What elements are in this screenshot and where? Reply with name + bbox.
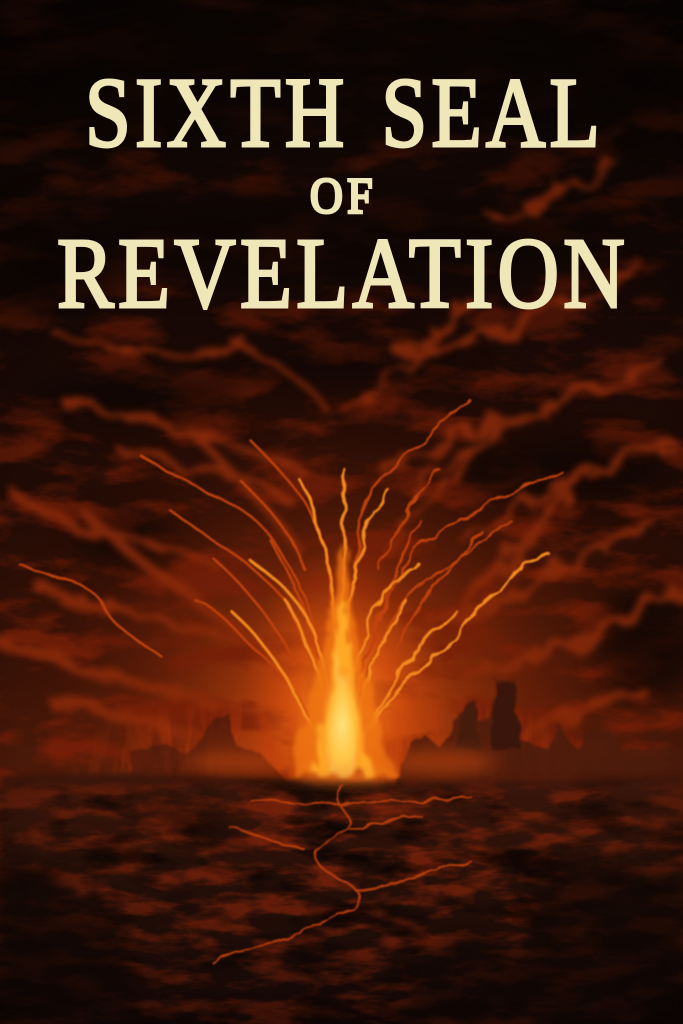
- scorched ground: [0, 773, 683, 1024]
- dark foreground rocks: [0, 800, 683, 1024]
- explosion glow: [0, 0, 683, 800]
- fire core: [318, 663, 366, 787]
- central fire column: [290, 540, 394, 774]
- converging cloud streaks: [0, 160, 683, 745]
- dark cloud masses: [0, 10, 683, 700]
- horizon glow: [297, 771, 387, 781]
- lava cracks: [215, 785, 470, 965]
- red storm clouds: [0, 0, 683, 790]
- title: [57, 57, 629, 329]
- ground shadow patches: [0, 778, 683, 1020]
- burning horizon haze: [74, 704, 551, 781]
- burning city base: [185, 750, 495, 774]
- fire veins: bright branches: [230, 470, 552, 745]
- fire veins: faint outer branches: [20, 400, 560, 735]
- ground texture: [0, 778, 683, 1024]
- fire glow around column: [237, 545, 447, 865]
- city ruins silhouette: [130, 680, 683, 790]
- title line: of: OF: [310, 169, 377, 225]
